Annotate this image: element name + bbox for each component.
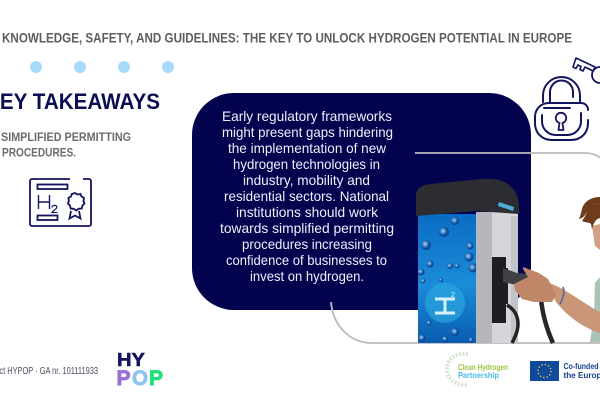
- charger blue panel: [418, 214, 476, 343]
- H2 badge: 2: [451, 292, 455, 299]
- panel text: hydrogen technologies in: [233, 156, 380, 172]
- panel text: residential sectors. National: [224, 188, 389, 204]
- logo: HyPOP: [116, 350, 163, 390]
- icon: hydrogen certificate: [30, 179, 91, 226]
- panel text: might present gaps hindering: [222, 124, 393, 140]
- subheading: simplified permitting: PROCEDURES.: [2, 148, 76, 160]
- panel text: procedures increasing: [242, 236, 372, 252]
- ring emblem: [447, 354, 468, 385]
- cable: [507, 305, 518, 343]
- hand: [514, 267, 556, 302]
- keyhole: [556, 113, 566, 130]
- panel: explanation: [192, 93, 531, 310]
- padlock body: [535, 103, 588, 140]
- padlock shackle: [543, 77, 580, 103]
- H2 badge: [425, 283, 465, 323]
- connector handle: [503, 268, 531, 285]
- panel text: invest on hydrogen.: [250, 268, 364, 284]
- panel text: industry, mobility and: [243, 172, 370, 188]
- POP letters: [116, 367, 163, 390]
- shirt: [590, 277, 600, 342]
- subheading: simplified permitting: SIMPLIFIED PERMITTING: [1, 132, 131, 144]
- panel text: confidence of businesses to: [226, 252, 387, 268]
- photo: person: [514, 197, 600, 342]
- bracelet: [560, 287, 564, 304]
- icon: padlock and key: [535, 58, 600, 140]
- POP letters: P: [116, 367, 130, 390]
- socket: [492, 257, 506, 323]
- key: [573, 58, 595, 71]
- subheading: simplified permitting: [1, 132, 131, 160]
- arm: [546, 282, 600, 333]
- charger cap: [416, 179, 519, 216]
- hair: [579, 197, 600, 229]
- panel text: institutions should work: [236, 204, 379, 220]
- photo frame lines: [331, 153, 600, 343]
- panel text: Early regulatory frameworks: [222, 108, 392, 124]
- logo: Clean Hydrogen Partnership: Clean Hydrogen: [458, 362, 508, 372]
- logo: Clean Hydrogen Partnership: [447, 354, 508, 385]
- bubbles: [418, 217, 478, 342]
- face: [592, 224, 600, 250]
- POP letters: P: [149, 367, 163, 390]
- logo: EU co-funded: [530, 361, 600, 381]
- charger body: [476, 212, 493, 343]
- panel text: [220, 108, 394, 284]
- logo: Clean Hydrogen Partnership: Partnership: [458, 370, 499, 380]
- progress dots: [30, 61, 174, 73]
- panel text: the implementation of new: [228, 140, 387, 156]
- panel text: towards simplified permitting: [220, 220, 394, 236]
- logo: HyPOP: HY: [117, 350, 145, 370]
- POP letters: O: [132, 367, 148, 390]
- photo: hydrogen charging station: [416, 179, 553, 343]
